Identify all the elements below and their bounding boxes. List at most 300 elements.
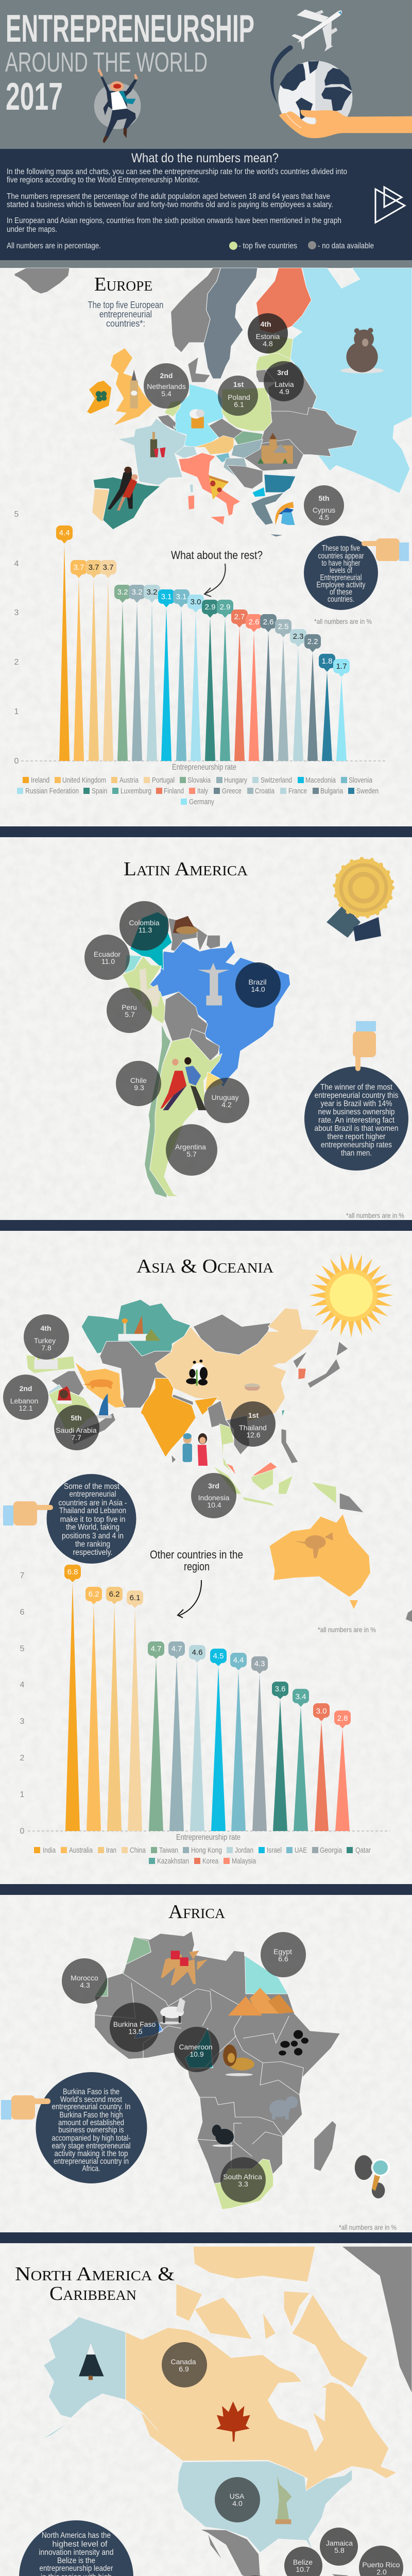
bubble: thailand: Thailand: [239, 1423, 267, 1432]
bubble: lebanon: Lebanon: [10, 1397, 38, 1405]
bubble: saudi arabia: Saudi Arabia: [56, 1426, 97, 1434]
icon: llama: [139, 969, 160, 1007]
text block: explanation: The numbers represent the percentage of the adult population aged between 18 and 64 years that have: [7, 192, 330, 201]
bubble: canada: [162, 2342, 207, 2387]
bubble: latvia: [264, 361, 304, 401]
note: all numbers: *all numbers are in %: [339, 2223, 397, 2231]
bar: austria: 3.7: [89, 563, 99, 572]
bar: china: [127, 1590, 143, 1831]
icon: wine: [150, 432, 165, 457]
bubble: brazil: [235, 962, 281, 1008]
bar: georgia: [251, 1656, 268, 1831]
chart legend: India: [43, 1846, 56, 1855]
bar: sweden: 1.8: [322, 657, 332, 666]
bar: slovenia: 3.1: [176, 592, 186, 601]
bar: spain: 2.9: [205, 603, 215, 612]
bubble: south africa: [220, 2157, 266, 2202]
icons: asian symbols: [34, 1315, 333, 1558]
icon: pyramids: [228, 1988, 294, 2015]
callout: asia note: entrepreneurial: [69, 1490, 116, 1499]
bubble: thailand: 1st: [248, 1411, 259, 1419]
chart legend: Georgia: [320, 1846, 342, 1855]
bubble: poland: Poland: [228, 393, 250, 401]
icons: north american symbols: [79, 2343, 291, 2576]
bubble: latvia: 3rd: [277, 368, 288, 377]
map: africa: [95, 1931, 340, 2210]
note: all numbers: *all numbers are in %: [314, 617, 372, 625]
bubble: estonia: 4th: [261, 320, 271, 328]
callout: top five note: countries.: [328, 595, 354, 604]
chart legend: Greece: [222, 787, 242, 795]
bubble: burkina faso: [110, 2003, 159, 2052]
text block: explanation: five regions according to the World Entrepreneurship Monitor.: [7, 176, 200, 184]
chart legend: Russian Federation: [25, 787, 79, 795]
bar: portugal: 3.7: [103, 563, 113, 572]
bubble: peru: 5.7: [125, 1010, 135, 1019]
axis title: Entrepreneurship rate: [172, 763, 236, 772]
chart legend: Sweden: [356, 787, 379, 795]
icon: airplane, globe and hand: [270, 9, 412, 138]
chart legend: Australia: [69, 1846, 93, 1855]
callout: asia note: respectively.: [73, 1548, 112, 1557]
chart legend: Portugal: [152, 776, 175, 785]
bar: australia: [85, 1587, 102, 1831]
bar: croatia: [275, 619, 291, 761]
heading: What do the numbers mean?: [131, 151, 279, 165]
bar: ireland: 4.4: [59, 529, 70, 537]
bubble: guatemala: [234, 2575, 276, 2576]
chart legend: Finland: [164, 787, 184, 795]
bubble: canada: Canada: [170, 2358, 196, 2366]
legend: top five / no data: [229, 241, 374, 250]
icon: astana buildings: [118, 1315, 160, 1341]
bubble: lebanon: [3, 1375, 48, 1420]
bar: hong kong: [168, 1641, 185, 1831]
axis labels: 0: [20, 1827, 25, 1836]
bubble: chile: 9.3: [134, 1083, 144, 1092]
bar: korea: 3.0: [316, 1707, 327, 1716]
axis labels: 3: [14, 608, 19, 617]
icon: turkish mosque: [34, 1349, 58, 1369]
map: europe: [14, 268, 412, 537]
bar: ireland: [56, 526, 73, 761]
text block: explanation: [7, 167, 347, 250]
bubble: indonesia: Indonesia: [198, 1494, 230, 1502]
callout: north america note: North America has the: [42, 2531, 111, 2540]
callout: top five note: Employee activity: [316, 581, 366, 589]
bubble: canada: 6.9: [179, 2365, 189, 2373]
axis labels: 2: [20, 1754, 25, 1762]
bubble: burkina faso: Burkina Faso: [113, 2020, 156, 2028]
callout: top five note: Entrepreneurial: [320, 573, 362, 582]
bar chart: europe rest: [14, 510, 386, 806]
bubble: turkey: Turkey: [34, 1336, 56, 1345]
bubble: estonia: [248, 313, 288, 353]
bubble: ecuador: 11.0: [101, 957, 115, 965]
bar: israel: 4.5: [213, 1652, 224, 1660]
callout: burkina faso note: World's second most: [60, 2095, 123, 2104]
bar: jordan: [189, 1645, 205, 1831]
icon: elephant: [269, 2096, 298, 2120]
chart legend: Luxemburg: [121, 787, 151, 795]
callout: top five note: These top five: [322, 544, 360, 553]
panel: what do the numbers mean: [0, 149, 412, 268]
bubble: chile: [116, 1061, 161, 1106]
icon: snowy tree: [79, 2343, 104, 2380]
chart legend: [34, 1846, 371, 1866]
bar: hungary: 3.2: [132, 588, 142, 597]
bubble: usa: 4.0: [232, 2499, 243, 2507]
axis labels: 2: [14, 658, 19, 667]
bubble: cyprus: [304, 485, 344, 526]
icon: pointing hand latin america: [353, 1021, 376, 1071]
icon: arab man: [57, 1386, 72, 1404]
bar: israel: [210, 1649, 227, 1831]
legend: top five / no data: - top five countries: [238, 242, 297, 250]
chart legend: Austria: [119, 776, 139, 785]
bubble: ecuador: [84, 935, 130, 980]
bar: luxemburg: [217, 600, 233, 761]
bubble: thailand: [230, 1401, 276, 1447]
bar: greece: 2.6: [263, 618, 273, 626]
bar: france: 2.3: [293, 632, 303, 641]
map: north america: [40, 2246, 412, 2576]
title: ENTREPRENEURSHIP: [6, 7, 254, 50]
bubble: indonesia: [191, 1473, 236, 1518]
bubble: jamaica: [320, 2528, 358, 2566]
bar: uk: [71, 560, 87, 761]
bubble: usa: USA: [230, 2492, 245, 2500]
callout: asia note: countries are in Asia -: [59, 1499, 127, 1507]
callout: other countries: region: [184, 1560, 210, 1573]
chart legend: [17, 776, 379, 806]
chart legend: UAE: [295, 1846, 307, 1855]
callout: burkina faso note: Africa.: [82, 2164, 100, 2173]
bubble: puerto rico: 2.0: [376, 2568, 387, 2576]
chart legend: Hong Kong: [191, 1846, 222, 1855]
bar: hong kong: 4.7: [171, 1645, 182, 1653]
icons: south american symbols: [139, 916, 229, 1110]
callout: burkina faso note: accompanied by high total-: [52, 2134, 131, 2143]
text block: intro: entrepreneurial: [99, 309, 152, 319]
bubble: chile: Chile: [130, 1076, 147, 1084]
callout: top five note: of these: [330, 588, 352, 597]
bubble: netherlands: 5.4: [161, 389, 171, 398]
chart legend: France: [288, 787, 307, 795]
chart legend: Hungary: [224, 776, 247, 785]
icon: lion: [223, 2045, 254, 2076]
heading: latin america: Latin America: [124, 858, 248, 880]
icon: clover: [96, 391, 107, 402]
axis labels: 5: [20, 1645, 25, 1653]
bar: switzerland: 3.2: [147, 588, 157, 597]
callout: brazil winner: new business ownership: [318, 1108, 394, 1116]
callout: top five note: to have higher: [321, 559, 360, 568]
icon: coffee beans: [279, 2030, 308, 2056]
bar: malaysia: 2.8: [337, 1714, 348, 1723]
bubble: turkey: 7.8: [41, 1344, 52, 1352]
icon: big ben: [130, 369, 138, 409]
text block: explanation: In European and Asian regions, countries from the sixth position onwards have been mentioned in the graph: [7, 216, 341, 225]
callout: burkina faso note: entrepreneurial country. In: [52, 2103, 131, 2111]
bubble: colombia: Colombia: [129, 919, 160, 927]
chart legend: Malaysia: [232, 1857, 256, 1866]
callout: brazil winner: The winner of the most: [320, 1083, 393, 1092]
icon: camels: [161, 1951, 208, 1985]
bar: italy: 2.6: [249, 618, 259, 626]
axis labels: 1: [14, 707, 19, 716]
icon: footprint and magnifier: [355, 2155, 390, 2198]
axis labels: 1: [20, 1790, 25, 1799]
bubble: netherlands: [144, 363, 189, 409]
bubble: estonia: 4.8: [263, 340, 273, 348]
bubble: saudi arabia: [54, 1405, 99, 1450]
bar: portugal: [100, 560, 116, 761]
panel: europe: [14, 268, 412, 806]
text block: intro: countries*:: [106, 318, 145, 329]
callout: brazil winner: entrepreneurship rates: [321, 1141, 392, 1149]
icon: pointing hand africa: [1, 2095, 50, 2120]
chart legend: Taiwan: [159, 1846, 178, 1855]
chart legend: Kazakhstan: [157, 1857, 189, 1866]
callout: brazil winner: about Brazil is that women: [314, 1124, 399, 1133]
bar: india: 6.8: [67, 1568, 78, 1577]
panel: header: [0, 0, 412, 149]
bubble: south africa: South Africa: [223, 2173, 262, 2181]
callout: north america note: [19, 2520, 133, 2576]
bar: taiwan: 4.7: [151, 1645, 161, 1653]
icon: beer: [190, 409, 204, 428]
bubble: latvia: Latvia: [274, 380, 294, 388]
heading: north america: North America &: [15, 2263, 175, 2285]
title: 2017: [6, 75, 63, 118]
chart legend: China: [130, 1846, 146, 1855]
icon: jumping businessman: [94, 69, 141, 143]
icon: pizza: [209, 476, 229, 500]
bar: russian federation: 3.0: [191, 598, 201, 606]
bubble: peru: [107, 988, 152, 1033]
callout: top five note: [304, 536, 378, 610]
bubble: poland: 1st: [233, 380, 244, 388]
icons: european landmarks: [96, 328, 384, 525]
axis labels: [14, 510, 19, 766]
bar: sweden: [319, 654, 335, 761]
chart legend: Qatar: [355, 1846, 371, 1855]
axis labels: [20, 1571, 25, 1836]
icon: pointing hand asia: [3, 1501, 53, 1526]
text block: explanation: under the maps.: [7, 225, 57, 234]
bubble: argentina: [166, 1124, 217, 1176]
bubble: usa: [215, 2477, 260, 2522]
bar: iran: [106, 1587, 123, 1831]
bubble: argentina: 5.7: [186, 1150, 197, 1158]
icon: leopard: [83, 1379, 113, 1389]
text block: intro: The top five European: [88, 300, 164, 310]
icon: triangles logo: [375, 187, 405, 223]
bar: australia: 6.2: [89, 1590, 99, 1599]
bar: croatia: 2.5: [278, 622, 288, 631]
bar: uae: 4.4: [233, 1656, 244, 1665]
text block: explanation: All numbers are in percentage.: [7, 242, 101, 250]
bar: macedonia: [158, 589, 175, 761]
bubble: latvia: 4.9: [279, 387, 289, 396]
icon: zebra: [160, 1997, 185, 2024]
icon: spartan helmet: [275, 502, 295, 525]
icon: christ statue: [198, 963, 229, 1006]
bubble: saudi arabia: 5th: [71, 1414, 81, 1422]
bubble: brazil: Brazil: [248, 978, 267, 986]
callout: north america note: entrepreneurship leader: [39, 2564, 113, 2573]
callout: brazil winner: than men.: [341, 1149, 372, 1158]
arrow: to the chart: [178, 1580, 201, 1618]
bar: uae: [230, 1653, 247, 1831]
bubble: uruguay: [204, 1078, 249, 1123]
bar: finland: [231, 609, 248, 761]
bar: italy: [246, 614, 262, 761]
text block: explanation: started a business which is between four and forty-two months old and is paying its employees a salary.: [7, 200, 333, 209]
callout: north america note: innovation intensity and: [39, 2548, 113, 2557]
bubble: morocco: Morocco: [71, 1974, 98, 1982]
callout: asia note: Some of the most: [64, 1482, 120, 1491]
icon: bear: [340, 328, 384, 374]
callout: brazil winner: there report higher: [328, 1132, 385, 1141]
bar: kazakhstan: [293, 1689, 309, 1831]
axis labels: 3: [20, 1717, 25, 1726]
bar: bulgaria: 2.2: [307, 637, 318, 646]
bubble: jamaica: Jamaica: [326, 2539, 353, 2547]
icon: maple leaf: [216, 2401, 250, 2442]
icon: kangaroo: [294, 1532, 333, 1558]
callout: what about the rest: What about the rest?: [171, 549, 263, 562]
callout: north america note: highest level of: [53, 2540, 108, 2549]
panel: africa: [1, 1901, 397, 2231]
bar: germany: 1.7: [336, 662, 347, 671]
heading: europe: Europe: [94, 274, 152, 295]
icon: noodle bowl: [244, 1383, 260, 1391]
icon: gorilla: [212, 2125, 234, 2147]
callout: asia note: Thailand and Lebanon: [59, 1506, 126, 1515]
chart legend: United Kingdom: [62, 776, 106, 785]
callout: asia note: the World, taking: [66, 1523, 119, 1532]
icon: burj al arab: [96, 1394, 112, 1418]
bar: luxemburg: 2.9: [220, 603, 230, 612]
text block: intro: [88, 300, 164, 329]
bar: macedonia: 3.1: [161, 592, 171, 601]
icon: sun: [308, 1252, 394, 1338]
bar: georgia: 4.3: [254, 1659, 265, 1668]
callout: burkina faso note: activity making it the top: [55, 2149, 128, 2158]
arrow: to the chart: [204, 564, 226, 597]
callout: asia note: positions 3 and 4 in: [62, 1532, 124, 1540]
callout: burkina faso note: amount of established: [58, 2119, 124, 2127]
chart legend: Bulgaria: [320, 787, 344, 795]
title: [5, 7, 254, 118]
callout: brazil winner: [304, 1066, 408, 1171]
panel: north america and caribbean: [15, 2246, 412, 2576]
icon: castle: [258, 433, 293, 464]
bubble: brazil: 14.0: [251, 985, 265, 993]
axis title: Entrepreneurship rate: [176, 1833, 241, 1842]
bubble: netherlands: Netherlands: [147, 382, 186, 391]
callout: asia note: make it to top five in: [60, 1515, 126, 1524]
bar: slovenia: [173, 589, 190, 761]
bubble: argentina: Argentina: [175, 1143, 206, 1151]
axis labels: 5: [14, 510, 19, 519]
icon: cacao: [173, 916, 198, 934]
bar: switzerland: [144, 585, 160, 761]
bubble: cameroon: Cameroon: [179, 2043, 213, 2051]
bar: finland: 2.7: [234, 613, 245, 621]
callout: burkina faso note: entrepreneurial country in: [54, 2157, 129, 2166]
bar: korea: [313, 1703, 330, 1831]
bar: hungary: [129, 585, 145, 761]
map: asia and oceania: [26, 1299, 370, 1597]
chart legend: Israel: [267, 1846, 282, 1855]
bubble: cyprus: Cyprus: [313, 506, 335, 514]
icon: tango dancers: [160, 1057, 207, 1110]
map: south america: [122, 912, 290, 1198]
chart legend: Italy: [197, 787, 208, 795]
bubble: lebanon: 12.1: [19, 1404, 33, 1412]
chart legend: Germany: [189, 798, 214, 806]
axis labels: 4: [20, 1681, 25, 1689]
bar: greece: [260, 614, 277, 761]
bar: spain: [202, 600, 218, 761]
bubble: morocco: [62, 1958, 107, 2004]
callout: burkina faso note: Burkina Faso the high: [60, 2111, 123, 2120]
map: tasmania: [350, 1600, 358, 1609]
bar: germany: [333, 659, 350, 761]
heading: africa: Africa: [168, 1901, 226, 1923]
callout: burkina faso note: Burkina Faso is the: [63, 2088, 119, 2096]
bubble: turkey: 4th: [40, 1324, 52, 1332]
bar: qatar: [272, 1682, 288, 1831]
chart legend: Macedonia: [305, 776, 336, 785]
callout: top five note: levels of: [330, 566, 353, 575]
bubble: uruguay: 4.2: [221, 1100, 232, 1109]
map: new zealand: [406, 1610, 412, 1622]
icon: pointing hand europe: [362, 538, 409, 561]
bar: taiwan: [148, 1641, 164, 1831]
bubble: cyprus: 4.5: [319, 513, 329, 521]
icon: indian couple: [183, 1433, 208, 1466]
bubble: puerto rico: [359, 2546, 403, 2576]
bar: iran: 6.2: [109, 1590, 119, 1599]
panel: latin america: [84, 858, 408, 1219]
callout: burkina faso note: business ownership is: [59, 2126, 124, 2134]
bubble: puerto rico: Puerto Rico: [362, 2561, 400, 2569]
callout: brazil winner: year is Brazil with 14%: [320, 1099, 392, 1108]
text block: explanation: In the following maps and charts, you can see the entrepreneurship rate for the world's countries divided into: [7, 167, 347, 176]
bar: india: [64, 1565, 81, 1831]
callout: burkina faso note: early stage entrepreneurial: [52, 2142, 131, 2150]
bubble: poland: 6.1: [234, 400, 244, 409]
bar: russian federation: [187, 595, 204, 761]
bubble: cameroon: 10.9: [190, 2050, 204, 2058]
bubble: colombia: [119, 901, 169, 951]
bubble: lebanon: 2nd: [20, 1384, 32, 1393]
bubble: turkey: [24, 1314, 69, 1360]
callout: asia note: the ranking: [75, 1540, 110, 1549]
icon: gold medal: [327, 859, 392, 941]
bubble: indonesia: 10.4: [207, 1501, 221, 1509]
bubble: morocco: 4.3: [80, 1981, 90, 1989]
bubble: saudi arabia: 7.7: [71, 1433, 81, 1442]
bubble: estonia: Estonia: [256, 332, 280, 341]
bar: slovakia: [114, 585, 131, 761]
bubble: cameroon: [174, 2027, 219, 2072]
chart legend: Jordan: [235, 1846, 253, 1855]
